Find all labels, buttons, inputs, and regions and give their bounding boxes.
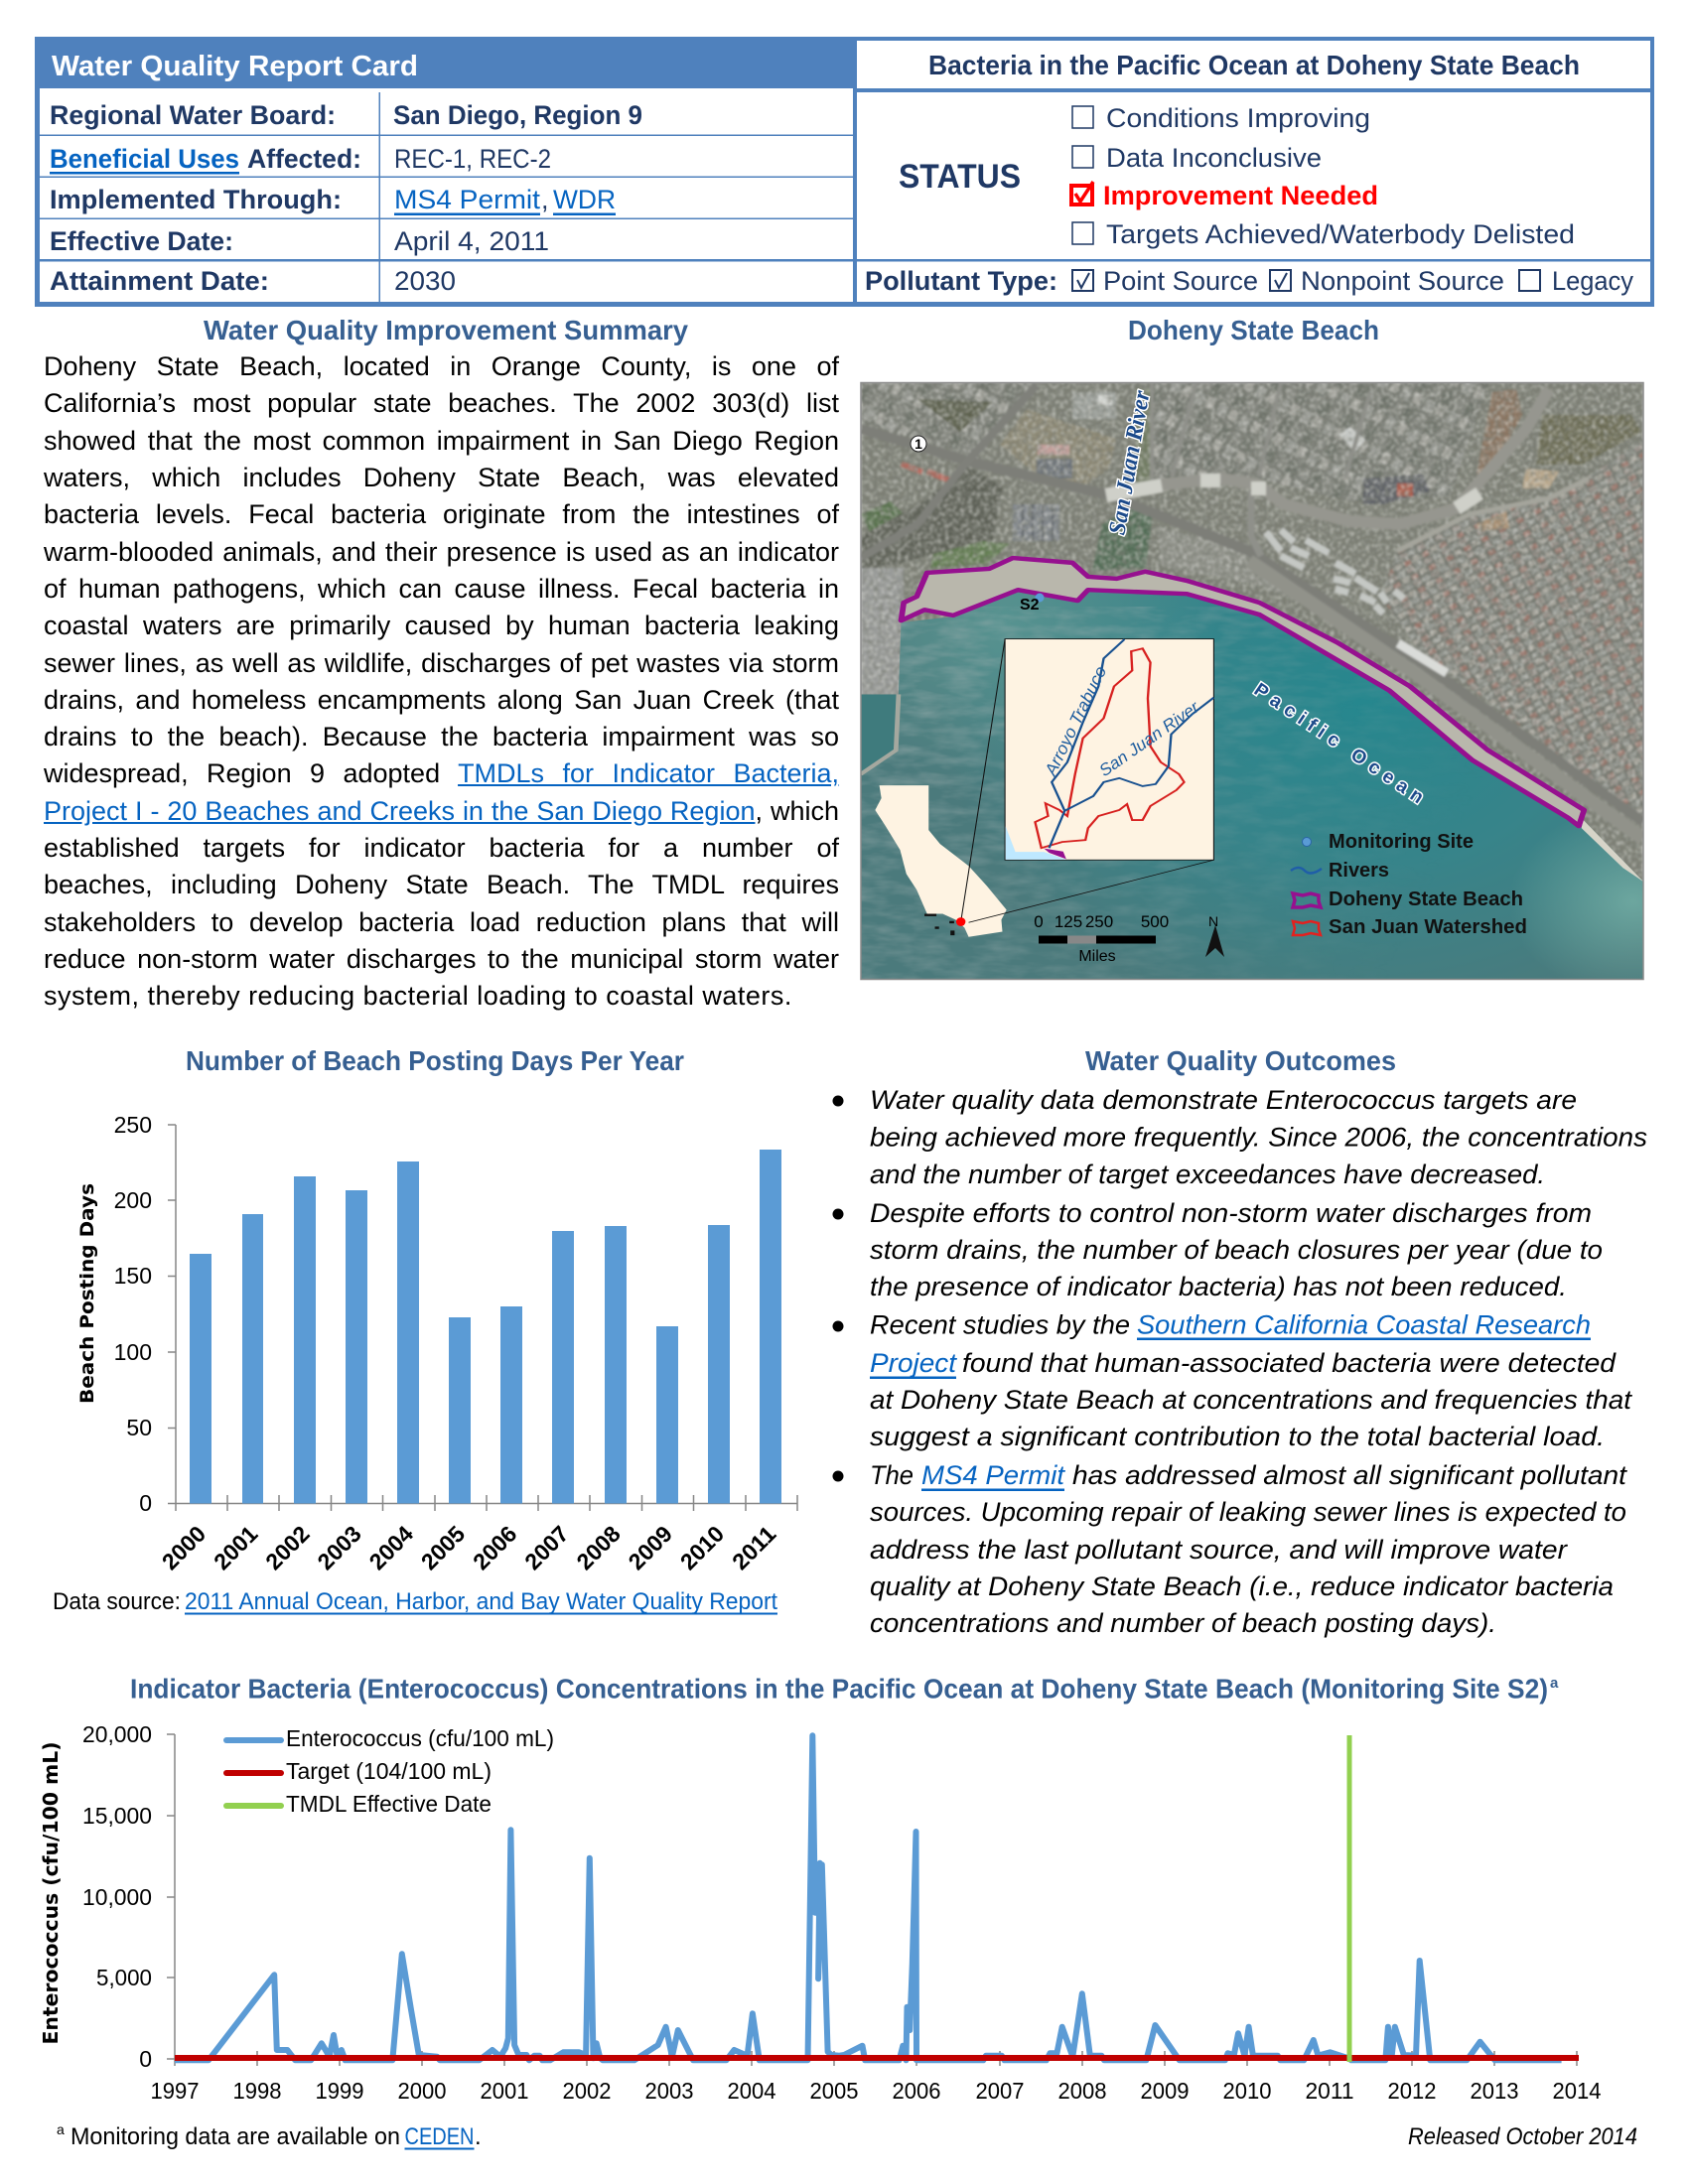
summary paragraph: Project I - 20 Beaches and Creeks in the San Diego Region, which <box>44 796 839 826</box>
scale bar: 500 <box>1141 912 1169 931</box>
y axis labels: 250 <box>114 1112 152 1138</box>
status option: improvement needed: Improvement Needed <box>1103 181 1378 210</box>
bullet 4 <box>832 1460 1628 1638</box>
x axis labels <box>157 1521 781 1574</box>
pollutant type row: Nonpoint Source <box>1301 266 1504 296</box>
summary paragraph: coastal waters are primarily caused by human bacteria leaking <box>44 611 839 640</box>
x axis labels: 2011 <box>727 1521 781 1574</box>
bullet 3: Southern California Coastal Research <box>1137 1310 1591 1340</box>
highway 1 shield: 1 <box>914 436 922 452</box>
bullet 3: suggest a significant contribution to the total bacterial load. <box>870 1422 1605 1451</box>
y axis labels: 150 <box>114 1263 152 1289</box>
title: Water Quality Report Card: Water Quality Report Card <box>52 51 418 82</box>
monitoring site S2 marker <box>1035 594 1045 602</box>
y axis labels: 100 <box>114 1339 152 1365</box>
TMDL effective date line <box>1346 1735 1352 2062</box>
y axis title: Beach Posting Days <box>76 1183 98 1404</box>
y axis labels <box>114 1112 152 1516</box>
status option: targets achieved: Targets Achieved/Waterbody Delisted <box>1106 219 1575 249</box>
bullet 3: found that human-associated bacteria were detected <box>962 1348 1617 1378</box>
y axis labels: 50 <box>126 1415 152 1440</box>
S2 label: S2 <box>1020 597 1040 614</box>
map legend: Monitoring Site <box>1329 831 1474 853</box>
title: waterbody name: Bacteria in the Pacific Ocean at Doheny State Beach <box>928 50 1580 80</box>
highway 1 shield <box>911 436 926 452</box>
x axis labels: 2014 <box>1553 2078 1602 2104</box>
y axis labels <box>82 1721 152 2072</box>
y axis labels: 15,000 <box>82 1803 152 1829</box>
status label: STATUS <box>899 158 1021 196</box>
line chart: enterococcus concentrations <box>39 1721 1602 2104</box>
heading: Number of Beach Posting Days Per Year: Number of Beach Posting Days Per Year <box>186 1045 684 1076</box>
scale bar: 250 <box>1085 912 1113 931</box>
x axis labels: 1999 <box>316 2078 363 2104</box>
y axis labels: 10,000 <box>82 1884 152 1910</box>
row: effective date <box>50 226 549 256</box>
summary paragraph: stakeholders to develop bacteria load reduction plans that will <box>44 907 839 937</box>
row: attainment date <box>50 266 456 296</box>
watershed inset <box>1005 639 1213 860</box>
land imagery <box>862 383 1642 881</box>
status option: data inconclusive: Data Inconclusive <box>1106 143 1322 173</box>
row: implemented through: , <box>541 185 549 214</box>
heading: Doheny State Beach: Doheny State Beach <box>1128 315 1379 345</box>
leader lines <box>961 639 1213 922</box>
x axis labels: 2002 <box>260 1521 315 1574</box>
north arrow <box>1205 913 1224 957</box>
chart legend <box>226 1725 554 1817</box>
bullet 4: sources. Upcoming repair of leaking sewer lines is expected to <box>870 1497 1626 1527</box>
scale bar: 0 <box>1034 912 1044 931</box>
summary paragraph: warm-blooded animals, and their presence is used as an indicator <box>44 537 839 567</box>
bar chart: beach posting days <box>76 1112 797 1574</box>
row: beneficial uses: REC-1, REC-2 <box>394 144 551 174</box>
summary paragraph: waters, which includes Doheny State Beach, was elevated <box>44 463 839 492</box>
footnote: a <box>57 2121 65 2137</box>
summary paragraph: of human pathogens, which can cause illness. Fecal bacteria in <box>44 574 839 604</box>
enterococcus series <box>175 1735 1562 2060</box>
x axis labels: 2000 <box>157 1521 211 1574</box>
bullet 1 <box>832 1085 1647 1189</box>
bars <box>190 1150 781 1503</box>
row: implemented through: MS4 Permit <box>394 185 541 214</box>
bullet 4: quality at Doheny State Beach (i.e., reduce indicator bacteria <box>870 1571 1614 1601</box>
data source note: Data source: <box>53 1588 181 1615</box>
heading: indicator bacteria concentrations: a <box>1550 1675 1559 1692</box>
bullet 1: and the number of target exceedances have decreased. <box>870 1160 1545 1189</box>
footnote: . <box>475 2123 482 2150</box>
summary paragraph: showed that the most common impairment in San Diego Region <box>44 426 839 456</box>
x axis labels: 2001 <box>481 2078 528 2104</box>
north arrow: N <box>1208 913 1218 929</box>
summary paragraph: reduce non-storm water discharges to the municipal storm water <box>44 944 839 974</box>
bullet 3: at Doheny State Beach at concentrations and frequencies that <box>870 1385 1633 1415</box>
x axis labels: 2013 <box>1470 2078 1519 2104</box>
map: aerial view of Doheny State Beach <box>861 382 1648 980</box>
summary paragraph: sewer lines, as well as wildlife, discharges of pet wastes via storm <box>44 648 839 678</box>
bullet 2: storm drains, the number of beach closures per year (due to <box>870 1235 1603 1265</box>
x axis labels: 1997 <box>151 2078 199 2104</box>
x axis labels: 2004 <box>364 1521 418 1574</box>
footnote: CEDEN <box>405 2123 475 2150</box>
footnote: Monitoring data are available on <box>70 2123 400 2150</box>
channel islands <box>924 913 954 935</box>
summary paragraph: system, thereby reducing bacterial loading to coastal waters. <box>44 981 792 1011</box>
row: implemented through: Implemented Through: <box>50 185 342 214</box>
status option: conditions improving: Conditions Improving <box>1106 103 1370 133</box>
summary paragraph: drains, and homeless encampments along San Juan Creek (that <box>44 685 839 715</box>
chart legend: Enterococcus (cfu/100 mL) <box>286 1725 554 1751</box>
row: attainment date: 2030 <box>394 266 456 296</box>
ocean <box>862 592 1642 979</box>
bullet 4: MS4 Permit <box>921 1460 1066 1490</box>
bullet 3 <box>832 1310 1633 1451</box>
row: regional water board <box>50 100 642 130</box>
heading: indicator bacteria concentrations: Indicator Bacteria (Enterococcus) Concentrations in the Pacific Ocean at Doheny State Beach (Monitoring Site S2) <box>130 1674 1548 1704</box>
x axis labels: 2003 <box>312 1521 366 1574</box>
ocean label: Pacific Ocean <box>1250 679 1427 808</box>
bullet 3: Project <box>870 1348 958 1378</box>
y axis labels: 200 <box>114 1187 152 1213</box>
beach outline <box>902 558 1584 826</box>
bullet 4: The <box>870 1460 914 1490</box>
x axis labels: 2005 <box>810 2078 858 2104</box>
summary paragraph <box>44 351 840 1011</box>
map legend: Rivers <box>1329 860 1389 882</box>
x axis labels: 2008 <box>571 1521 626 1574</box>
x axis labels: 2004 <box>727 2078 776 2104</box>
release date: Released October 2014 <box>1408 2123 1637 2150</box>
x axis labels: 2005 <box>416 1521 470 1574</box>
row: regional water board: Regional Water Board: <box>50 100 336 130</box>
locator dot <box>956 917 965 926</box>
bullet 4: address the last pollutant source, and will improve water <box>870 1535 1568 1565</box>
pollutant type row: Pollutant Type: <box>865 266 1057 296</box>
x axis labels: 2006 <box>892 2078 941 2104</box>
jetty <box>861 694 899 774</box>
bullet 2: the presence of indicator bacteria) has not been reduced. <box>870 1272 1567 1301</box>
bullet 2: Despite efforts to control non-storm water discharges from <box>870 1198 1592 1228</box>
y axis labels: 0 <box>139 2046 152 2072</box>
pollutant type row: Legacy <box>1552 266 1633 296</box>
bullet 1: Water quality data demonstrate Enterococcus targets are <box>870 1085 1577 1115</box>
x axis labels: 2011 <box>1305 2078 1354 2104</box>
x axis labels: 2007 <box>519 1521 574 1574</box>
row: regional water board: San Diego, Region 9 <box>393 100 642 130</box>
inset label: Arroyo Trabuco: Arroyo Trabuco <box>1041 663 1110 779</box>
x axis labels: 2000 <box>397 2078 447 2104</box>
heading: Water Quality Improvement Summary: Water Quality Improvement Summary <box>204 315 688 345</box>
row: effective date: Effective Date: <box>50 226 233 256</box>
x axis labels: 2002 <box>562 2078 612 2104</box>
bullet 4: concentrations and number of beach posting days). <box>870 1608 1496 1638</box>
scale bar <box>1034 912 1169 965</box>
summary paragraph: beaches, including Doheny State Beach. The TMDL requires <box>44 870 839 899</box>
chart legend: Target (104/100 mL) <box>286 1758 492 1784</box>
summary paragraph: drains to the beach). Because the bacteria impairment was so <box>44 722 839 751</box>
California locator <box>875 785 1007 937</box>
heading: Water Quality Outcomes: Water Quality Outcomes <box>1085 1045 1396 1076</box>
row: beneficial uses <box>50 144 551 175</box>
x axis labels: 2010 <box>1223 2078 1271 2104</box>
outcomes bullet list <box>832 1085 1647 1638</box>
bullet 2 <box>832 1198 1603 1301</box>
target line <box>175 2055 1579 2061</box>
map legend: Doheny State Beach <box>1329 888 1523 910</box>
x axis labels <box>151 2078 1602 2104</box>
row: implemented through <box>50 185 616 215</box>
y axis title: Enterococcus (cfu/100 mL) <box>39 1741 63 2045</box>
data source note: 2011 Annual Ocean, Harbor, and Bay Water Quality Report <box>185 1588 777 1615</box>
axes <box>167 1734 1577 2066</box>
x axis labels: 2009 <box>624 1521 677 1574</box>
x axis labels: 1998 <box>232 2078 282 2104</box>
river label: San Juan River <box>1104 388 1156 537</box>
summary paragraph: widespread, Region 9 adopted TMDLs for Indicator Bacteria, <box>44 758 839 788</box>
scale bar: Miles <box>1078 948 1116 965</box>
summary paragraph: established targets for indicator bacteria for a number of <box>44 833 839 863</box>
x axis labels: 2010 <box>675 1521 729 1574</box>
row: effective date: April 4, 2011 <box>394 226 549 256</box>
pollutant type row <box>865 266 1633 296</box>
row: beneficial uses: Affected: <box>247 144 361 174</box>
bullet 1: being achieved more frequently. Since 2006, the concentrations <box>870 1122 1647 1152</box>
scale bar: 125 <box>1055 912 1082 931</box>
row: beneficial uses: Beneficial Uses <box>50 144 239 174</box>
bullet 3: Recent studies by the <box>870 1310 1130 1340</box>
summary paragraph: Doheny State Beach, located in Orange County, is one of <box>44 351 839 381</box>
bullet 4: has addressed almost all significant pollutant <box>1072 1460 1628 1490</box>
row: implemented through: WDR <box>553 185 616 214</box>
y axis labels: 0 <box>139 1490 152 1516</box>
summary paragraph: bacteria levels. Fecal bacteria originate from the intestines of <box>44 499 839 529</box>
y axis labels: 20,000 <box>82 1721 152 1747</box>
x axis labels: 2006 <box>468 1521 521 1574</box>
x axis labels: 2012 <box>1388 2078 1436 2104</box>
summary paragraph: California’s most popular state beaches. The 2002 303(d) list <box>44 388 839 418</box>
inset label: San Juan River: San Juan River <box>1096 697 1203 780</box>
x axis labels: 2008 <box>1058 2078 1106 2104</box>
x axis labels: 2001 <box>209 1521 263 1574</box>
x axis labels: 2009 <box>1140 2078 1190 2104</box>
x axis labels: 2007 <box>975 2078 1025 2104</box>
chart legend: TMDL Effective Date <box>286 1791 492 1817</box>
map legend: San Juan Watershed <box>1329 916 1527 938</box>
axes <box>168 1125 797 1511</box>
x axis labels: 2003 <box>645 2078 693 2104</box>
y axis labels: 5,000 <box>96 1965 152 1990</box>
row: attainment date: Attainment Date: <box>50 266 269 296</box>
pollutant type row: Point Source <box>1103 266 1258 296</box>
map legend <box>1291 831 1527 938</box>
report card header table <box>35 37 1654 307</box>
